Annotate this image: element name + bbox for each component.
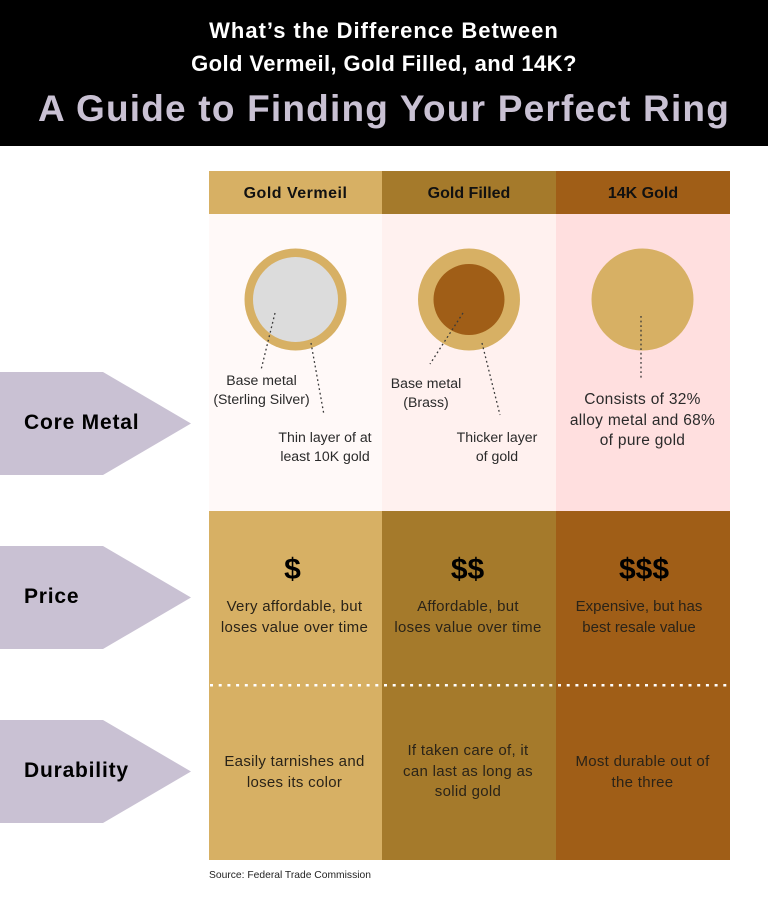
column header: 14K Gold — [556, 171, 730, 214]
durability text: If taken care of, it — [407, 742, 529, 759]
core metal panel: Gold Filled — [382, 214, 556, 511]
label: thin layer — [278, 429, 372, 464]
row arrow: Durability — [0, 720, 191, 823]
title: What’s the Difference Between — [209, 18, 559, 43]
label: base metal sterling silver: (Sterling Silver) — [213, 391, 310, 407]
label: base metal brass: (Brass) — [403, 394, 449, 410]
label: thicker layer — [456, 429, 538, 464]
column header: Gold Vermeil: Gold Vermeil — [244, 185, 347, 202]
title — [191, 18, 577, 76]
label: 14K composition — [570, 391, 715, 449]
durability text: the three — [612, 774, 673, 791]
column header: 14K Gold: 14K Gold — [608, 185, 678, 202]
row label: Price — [24, 585, 79, 608]
durability text: can last as long as — [403, 763, 533, 780]
price text: Expensive, but has — [576, 598, 702, 615]
source note: Source: Federal Trade Commission — [209, 870, 371, 881]
durability text: loses its color — [247, 774, 342, 791]
row arrow: Price — [0, 546, 191, 649]
subtitle: A Guide to Finding Your Perfect Ring — [38, 88, 730, 129]
label: 14K composition: of pure gold — [600, 432, 685, 449]
label: base metal sterling silver: Base metal — [226, 372, 297, 388]
label: thin layer: least 10K gold — [280, 448, 370, 464]
price text — [221, 598, 368, 636]
label: thicker layer: of gold — [476, 448, 518, 464]
row label: Durability — [24, 759, 129, 782]
price text: loses value over time — [394, 619, 542, 636]
column body: Gold Vermeil — [209, 511, 382, 860]
column header: Gold Filled — [382, 171, 556, 214]
durability text: Most durable out of — [575, 753, 710, 770]
icon: 14K solid ring — [592, 248, 694, 379]
durability text — [224, 753, 365, 791]
title: Gold Vermeil, Gold Filled, and 14K? — [191, 51, 577, 76]
price text — [394, 598, 542, 636]
column body: 14K Gold — [556, 511, 730, 860]
durability text — [403, 742, 533, 800]
durability text: solid gold — [435, 783, 501, 800]
durability text: Easily tarnishes and — [224, 753, 365, 770]
column header: Gold Filled: Gold Filled — [428, 185, 510, 202]
ring diagrams — [244, 248, 694, 416]
price text: Affordable, but — [417, 598, 519, 615]
label: 14K composition: alloy metal and 68% — [570, 412, 715, 429]
header banner — [0, 0, 768, 146]
label: base metal brass — [391, 375, 461, 410]
label: thicker layer: Thicker layer — [457, 429, 537, 445]
price text: Very affordable, but — [227, 598, 362, 615]
icon: vermeil ring — [244, 248, 346, 415]
label: base metal sterling silver — [213, 372, 310, 407]
price text — [576, 598, 702, 636]
column body: Gold Filled — [382, 511, 556, 860]
row label: Core Metal — [24, 411, 139, 434]
core metal panel: Gold Vermeil — [209, 214, 382, 511]
durability text — [575, 753, 710, 791]
price symbol: $$$ — [619, 553, 669, 586]
core metal panel: 14K Gold — [556, 214, 730, 511]
label: base metal brass: Base metal — [391, 375, 461, 391]
label: 14K composition: Consists of 32% — [584, 391, 701, 408]
row arrow: Core Metal — [0, 372, 191, 475]
price symbol: $ — [284, 553, 301, 586]
price symbol: $$ — [451, 553, 484, 586]
price text: best resale value — [582, 619, 696, 636]
column header: Gold Vermeil — [209, 171, 382, 214]
icon: gold filled ring — [418, 248, 520, 415]
price text: loses value over time — [221, 619, 368, 636]
label: thin layer: Thin layer of at — [278, 429, 372, 445]
